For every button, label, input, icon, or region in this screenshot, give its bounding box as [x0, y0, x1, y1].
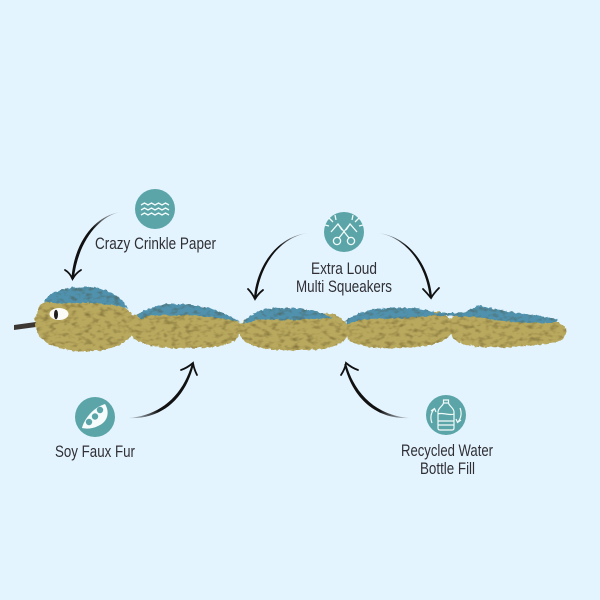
label [401, 441, 493, 478]
tan body [35, 298, 566, 351]
arrow right [378, 233, 439, 298]
callout: crazy crinkle paper [65, 189, 216, 279]
tongue [14, 322, 36, 330]
blue back markings [45, 287, 558, 324]
label: Soy Faux Fur [55, 442, 135, 461]
arrow [341, 363, 410, 418]
label: Multi Squeakers [296, 277, 392, 296]
callout: soy faux fur [55, 363, 197, 461]
icon: squeakers [324, 212, 364, 252]
label: Crazy Crinkle Paper [95, 234, 216, 253]
arrow left [248, 233, 308, 299]
icon: waves [135, 189, 175, 229]
arrow [65, 212, 120, 279]
label: Extra Loud [311, 259, 377, 278]
callout: extra loud multi squeakers [248, 212, 439, 299]
arrow [128, 363, 197, 418]
label: Recycled Water [401, 441, 493, 460]
eye [50, 308, 68, 320]
plush snake toy [14, 287, 566, 351]
label [296, 259, 392, 296]
icon: soy pod [75, 397, 115, 437]
icon: recycled bottle [426, 395, 466, 435]
callout: recycled water bottle fill [341, 363, 493, 478]
label: Bottle Fill [420, 459, 475, 478]
